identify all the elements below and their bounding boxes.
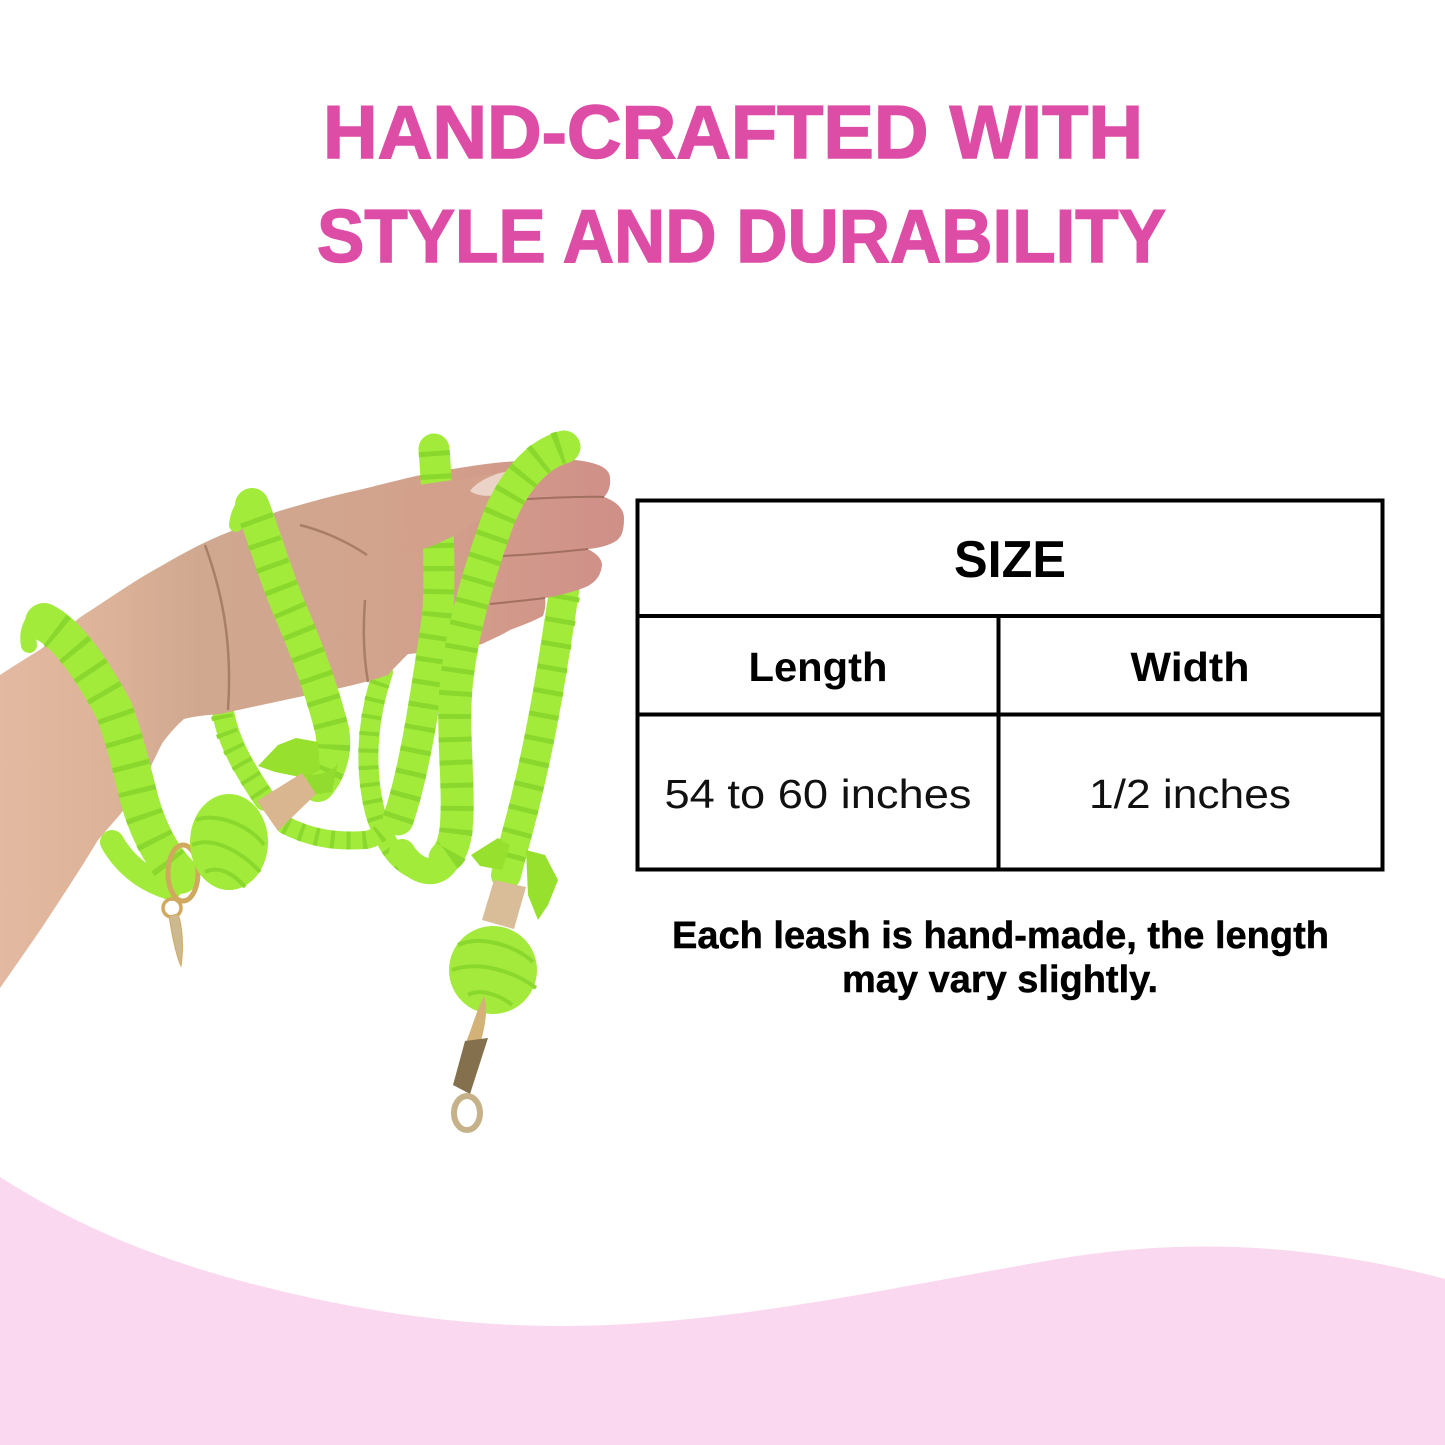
fingernail (470, 471, 513, 496)
title (317, 90, 1166, 278)
size table (637, 500, 1383, 870)
upper tan wrap (257, 773, 316, 831)
column heading: length: Length (748, 644, 888, 690)
rope: long strand over fingers (402, 447, 564, 871)
upper frayed tassel (258, 738, 320, 778)
rope: thin loop behind palm (368, 672, 425, 872)
column heading: width: Width (1130, 644, 1250, 690)
lower knot (449, 926, 537, 1014)
upper knot (190, 762, 338, 890)
pink wave background (0, 1177, 1445, 1445)
lower frayed tassels (471, 838, 558, 920)
palm creases (205, 525, 368, 710)
photo: hand holding green rope leash (0, 447, 624, 1130)
metal ring and clip (163, 845, 198, 966)
hand and forearm (0, 459, 624, 988)
thumb (400, 470, 514, 553)
rope: lower-left strand behind hand (222, 705, 265, 800)
title: STYLE AND DURABILITY (317, 194, 1166, 278)
value: length: 54 to 60 inches (664, 771, 972, 817)
lower tan wrap (482, 880, 526, 929)
rope: strand behind ring finger (506, 585, 565, 875)
table heading: SIZE (954, 531, 1066, 589)
metal snap hook (453, 996, 488, 1130)
note text: Each leash is hand-made, the length (672, 915, 1329, 957)
rope: wrist loop (44, 622, 180, 875)
finger gaps (490, 497, 604, 604)
rope: upper loop over hand (236, 502, 333, 785)
rope: strand behind wrist (28, 620, 170, 888)
title: HAND-CRAFTED WITH (323, 90, 1143, 174)
value: width: 1/2 inches (1089, 771, 1291, 817)
rope: strand from knot up behind thumb (285, 449, 439, 840)
note text (672, 915, 1329, 1001)
note text: may vary slightly. (842, 959, 1158, 1001)
